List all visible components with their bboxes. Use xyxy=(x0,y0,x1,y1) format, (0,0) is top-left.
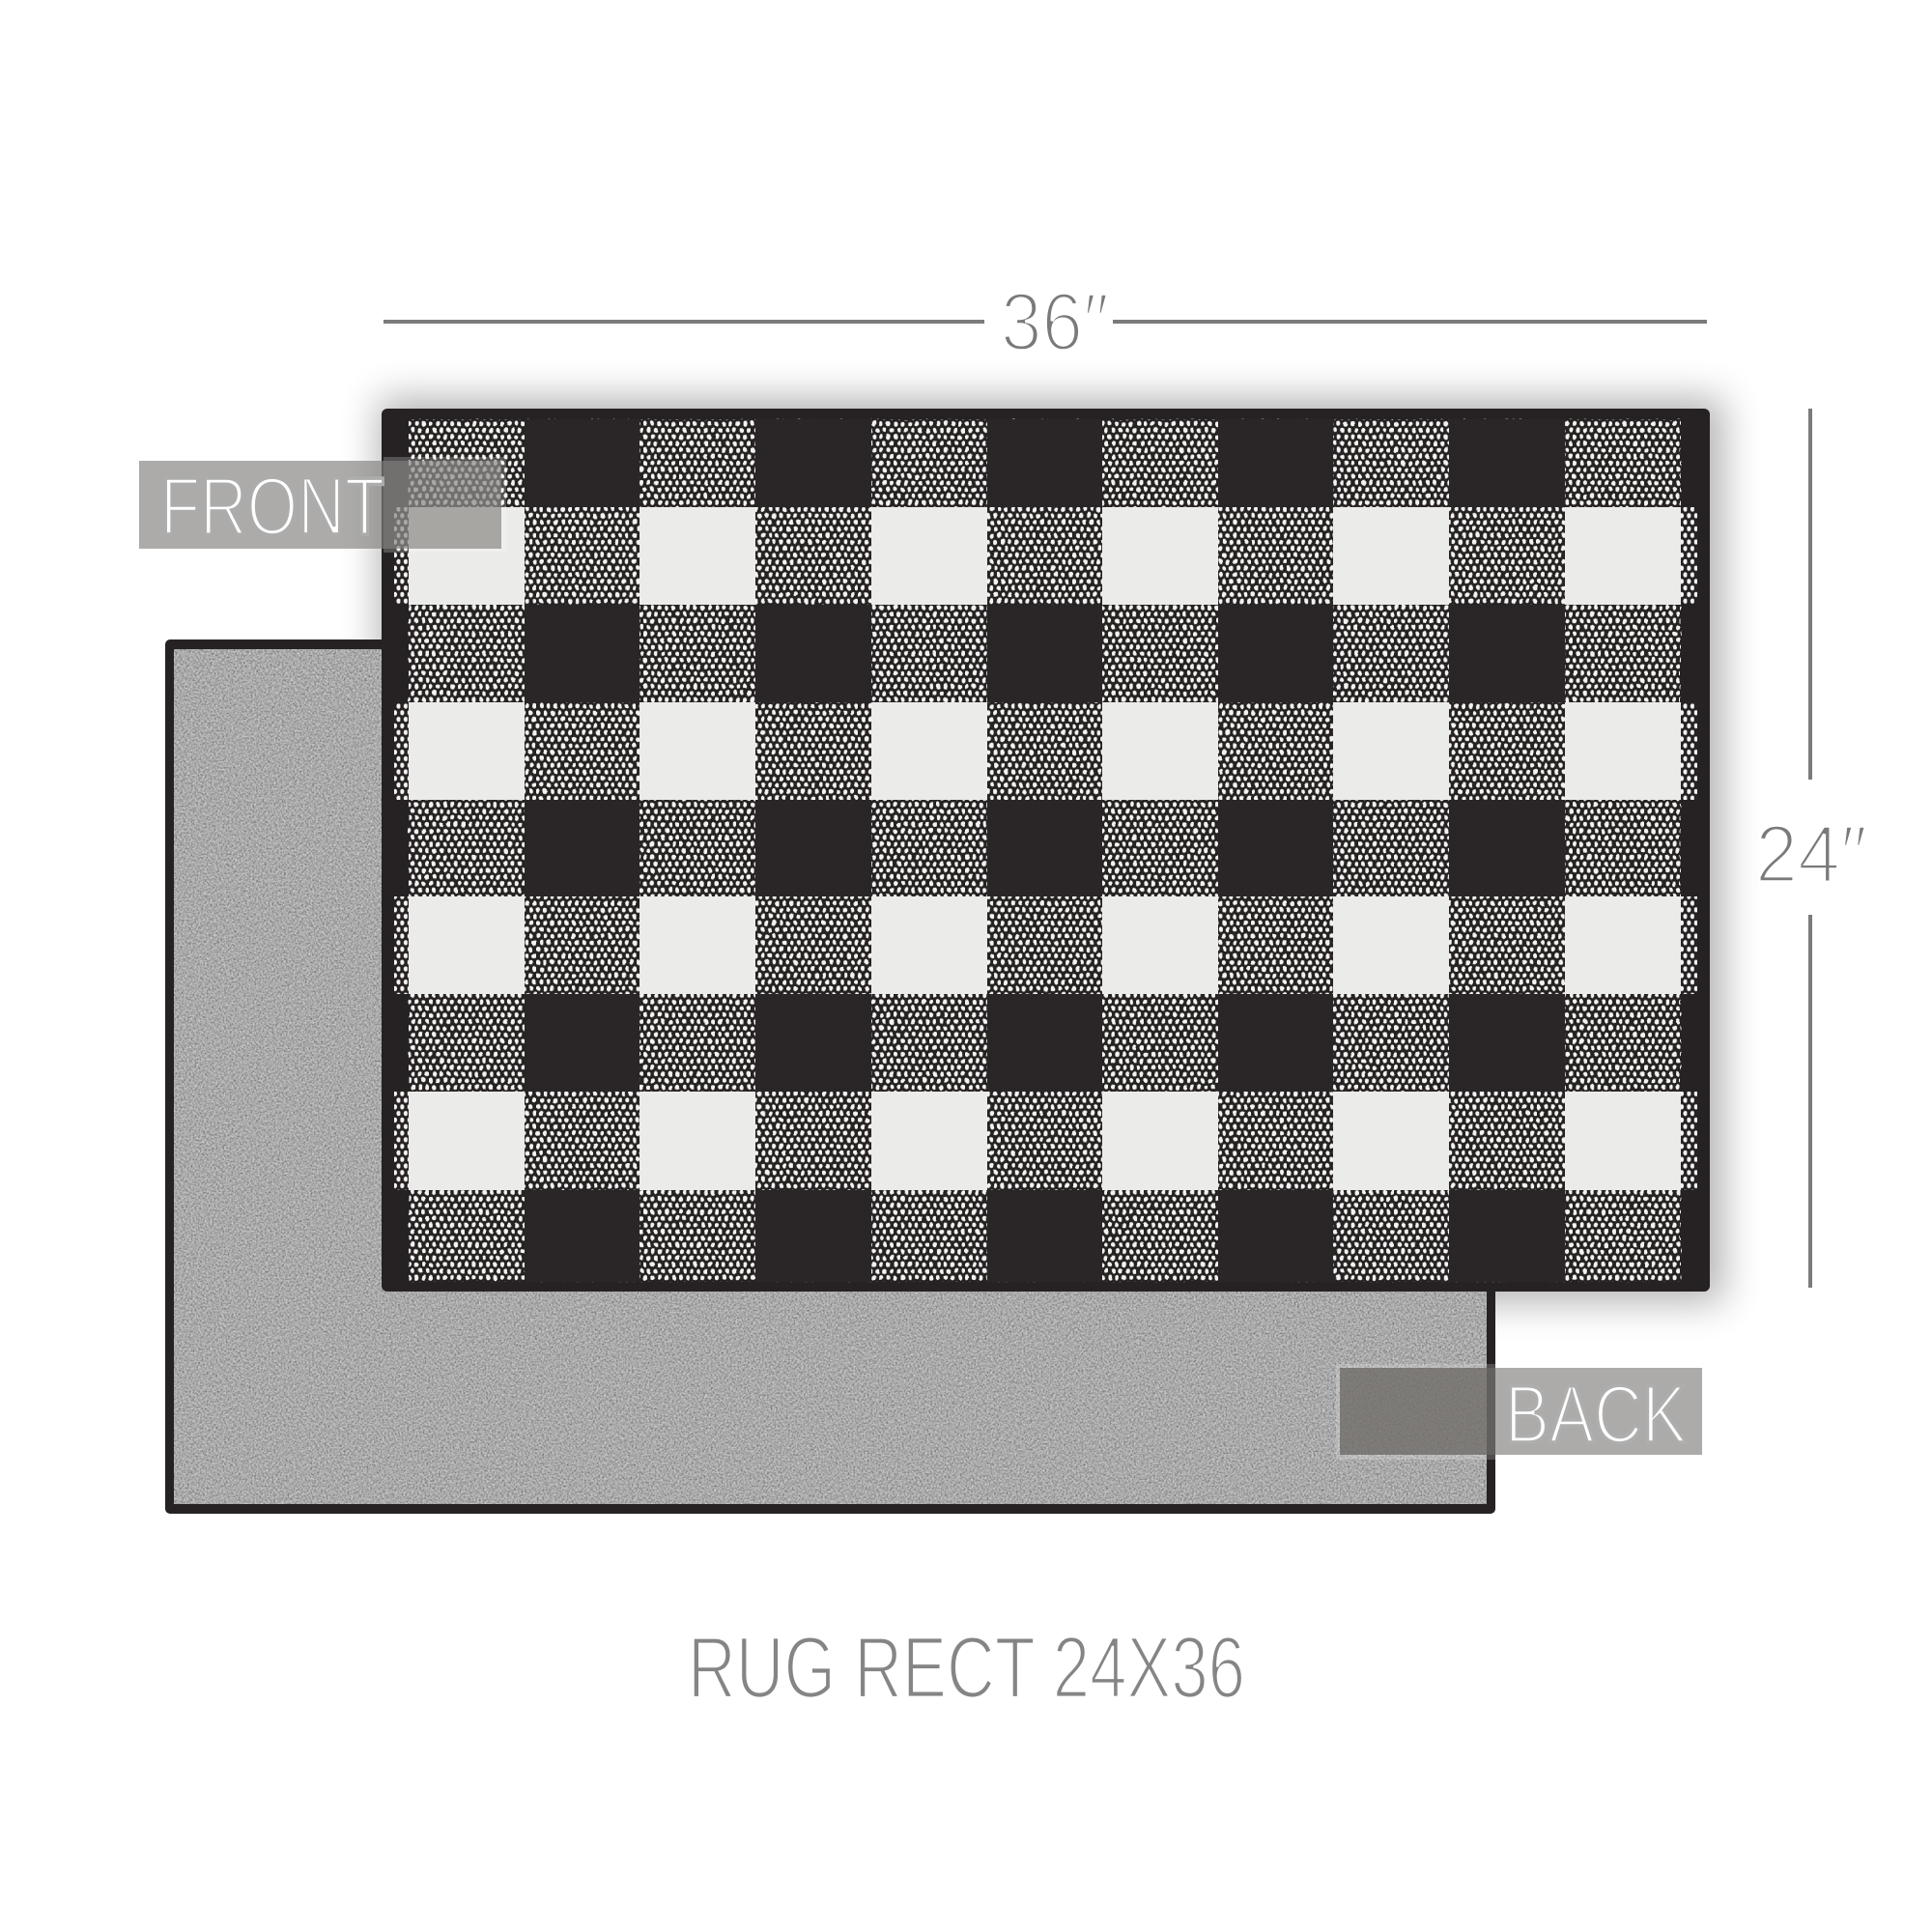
front rug drop shadow xyxy=(379,398,1723,1302)
dimension: width 36 inches xyxy=(384,276,1707,367)
dimension: height 24 inches: 24″ xyxy=(1755,809,1867,899)
dimension: width 36 inches: 36″ xyxy=(1001,276,1109,367)
label: BACK xyxy=(1336,1364,1702,1460)
label: FRONT: FRONT xyxy=(160,461,384,552)
white check squares xyxy=(409,507,1681,1190)
dark check squares xyxy=(525,419,1565,1282)
panel: back of rug xyxy=(165,639,1495,1514)
woven dotted check texture xyxy=(409,419,1681,1282)
label: BACK: BACK xyxy=(1505,1369,1687,1460)
dotted edge slivers xyxy=(394,507,1697,1190)
panel: front of rug, buffalo check xyxy=(382,409,1710,1292)
dimension: height 24 inches xyxy=(1755,409,1867,1288)
title: RUG RECT 24X36 xyxy=(688,1620,1245,1717)
